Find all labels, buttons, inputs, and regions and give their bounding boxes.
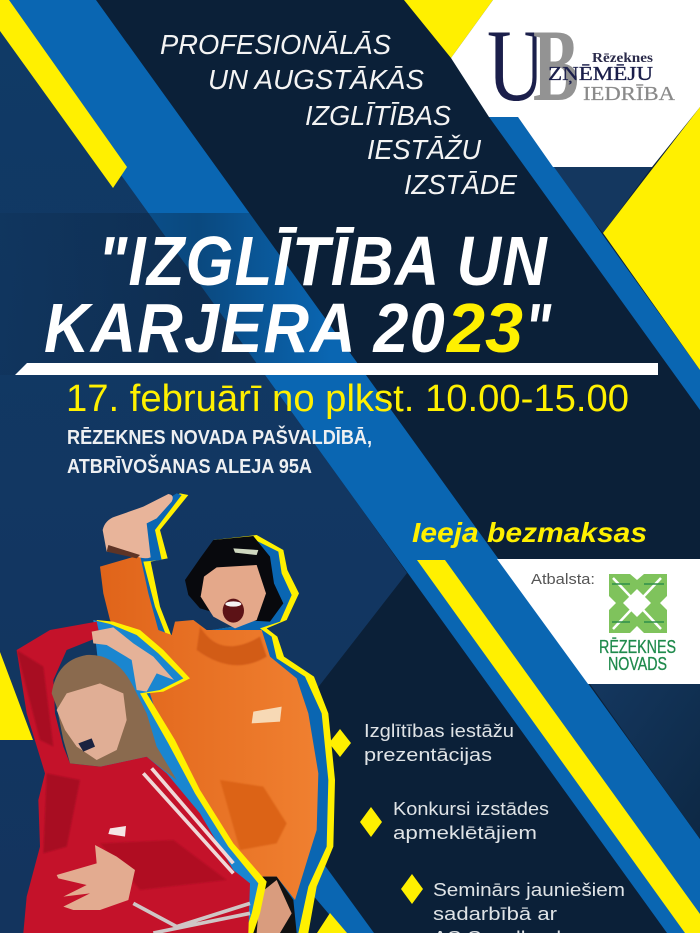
triangle: top yellow — [404, 0, 493, 58]
diagonal band: lower left blue — [300, 843, 374, 933]
bullet list — [329, 721, 625, 933]
trousers and lower hand — [233, 877, 297, 933]
triangle: left yellow — [0, 652, 33, 740]
panel: navy left area — [0, 0, 407, 933]
bullet: presentations: prezentācijas — [364, 745, 492, 765]
people — [17, 493, 335, 933]
sleeve stripes — [143, 768, 233, 873]
supporter logo: RĒZEKNES — [599, 637, 676, 657]
hoodie — [100, 555, 318, 900]
logo: Uzņēmēju biedrība — [487, 9, 676, 123]
bullet: contests: Konkursi izstādes — [393, 799, 549, 819]
logo: Uzņēmēju biedrība: U — [487, 9, 545, 123]
triangle: right yellow — [603, 107, 700, 370]
face — [201, 565, 266, 628]
diagonal band: right blue — [489, 117, 700, 410]
bullet: contests — [360, 799, 549, 843]
panel: supporter white — [497, 559, 700, 684]
supporter logo: NOVADS — [608, 654, 667, 674]
pointing hand — [103, 494, 173, 558]
supporter logo: Atbalsta: — [531, 571, 595, 588]
icon: Rēzekne county emblem — [609, 574, 667, 633]
hand on head — [92, 627, 174, 692]
triangle: lower left yellow — [317, 913, 347, 933]
text block: exhibition subtitle: IZSTĀDE — [404, 169, 517, 200]
date and time: 17. februārī no plkst. 10.00-15.00 — [66, 378, 629, 420]
free entry: Ieeja bezmaksas — [412, 517, 647, 548]
panel: navy right patch — [553, 167, 652, 233]
supporter logo — [531, 571, 676, 674]
stripe: top left yellow — [0, 0, 127, 188]
address: ATBRĪVOŠANAS ALEJA 95A — [67, 454, 312, 478]
stripe: lower yellow — [417, 560, 700, 933]
text block: exhibition subtitle: PROFESIONĀLĀS — [160, 29, 391, 60]
bullet: seminar: Seminārs jauniešiem — [433, 880, 625, 900]
bullet: seminar: sadarbībā ar — [433, 904, 557, 924]
address: RĒZEKNES NOVADA PAŠVALDĪBĀ, — [67, 425, 372, 449]
logo: Uzņēmēju biedrība: B — [533, 9, 579, 123]
jacket folds — [17, 650, 227, 890]
red jacket — [17, 622, 250, 933]
bullet: contests: apmeklētājiem — [393, 823, 537, 843]
divider bar — [15, 363, 658, 375]
face — [57, 683, 127, 760]
figure: woman with outline — [17, 620, 267, 933]
text block: exhibition subtitle: IESTĀŽU — [367, 134, 482, 165]
panel: lower right navy — [590, 684, 700, 839]
title: " — [525, 289, 552, 367]
text block: exhibition subtitle — [160, 29, 517, 200]
hair — [52, 655, 177, 780]
hand on waist — [57, 845, 135, 910]
address — [67, 425, 372, 478]
title: "IZGLĪTĪBA UN — [98, 222, 548, 300]
bullet: presentations — [329, 721, 514, 765]
figure: man with outline — [100, 493, 335, 933]
bullet: presentations: Izglītības iestāžu — [364, 721, 514, 741]
title backdrop — [0, 213, 330, 375]
logo: Uzņēmēju biedrība: Rēzeknes — [592, 51, 654, 66]
text block: exhibition subtitle: IZGLĪTĪBAS — [305, 100, 451, 131]
title: 23 — [445, 289, 523, 367]
logo: Uzņēmēju biedrība: IEDRĪBA — [583, 83, 676, 105]
bullet: seminar — [401, 874, 625, 933]
logo: Uzņēmēju biedrība: ZŅĒMĒJU — [548, 63, 654, 85]
text block: exhibition subtitle: UN AUGSTĀKĀS — [208, 64, 424, 95]
title — [44, 222, 552, 367]
panel: logo white — [451, 0, 700, 167]
title: KARJERA 20 — [44, 289, 446, 367]
bucket hat — [185, 536, 283, 622]
